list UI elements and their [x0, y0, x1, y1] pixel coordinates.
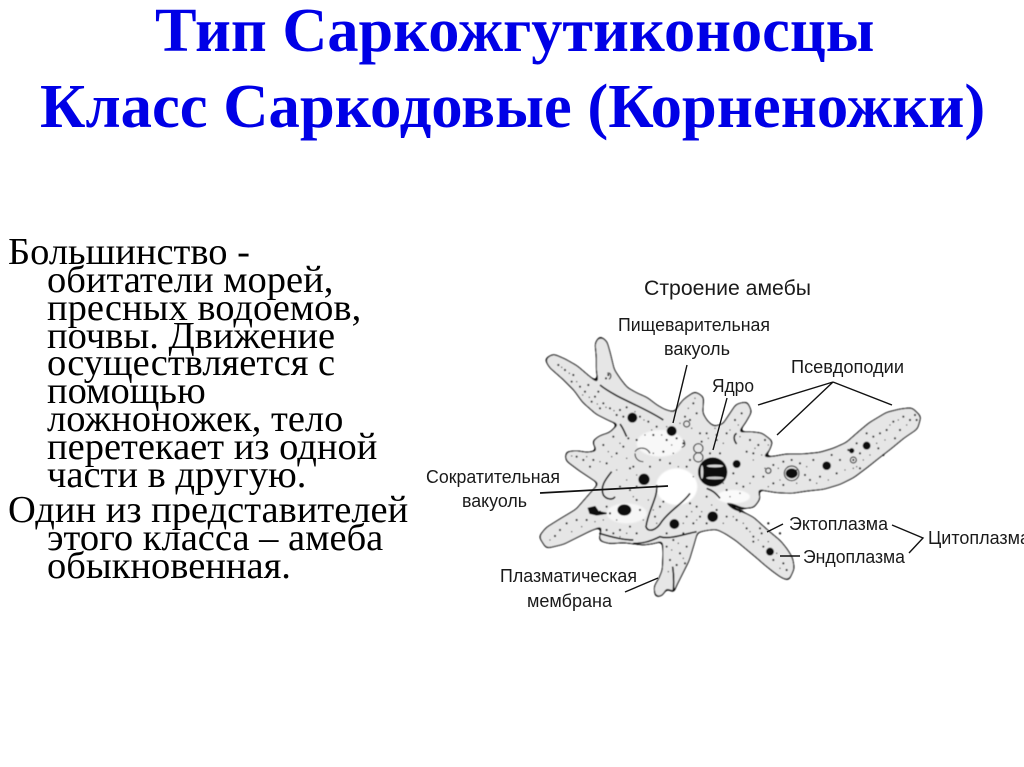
text block: description: этого класса – амеба	[47, 517, 383, 559]
text block: description: перетекает из одной	[47, 426, 377, 468]
text block: description: почвы. Движение	[47, 315, 335, 357]
label: plasma membrane: мембрана	[527, 591, 613, 611]
illustration: amoeba	[540, 337, 920, 596]
text block: description: части в другую.	[47, 454, 306, 496]
title	[40, 0, 985, 141]
text block: description: Один из представителей	[8, 489, 408, 531]
text block: description: осуществляется с	[47, 342, 335, 384]
label: pseudopodia: Псевдоподии	[791, 357, 904, 377]
food vacuoles	[588, 413, 870, 555]
text block: description: ложноножек, тело	[47, 398, 343, 440]
stipple	[555, 365, 917, 570]
text block: description: обитатели морей,	[47, 259, 333, 301]
label: contractile vacuole: вакуоль	[462, 491, 527, 511]
label: endoplasm: Эндоплазма	[803, 547, 906, 567]
nucleus	[698, 457, 727, 487]
text block: description: обыкновенная.	[47, 545, 291, 587]
small vesicles	[607, 373, 856, 481]
label: ectoplasm: Эктоплазма	[789, 514, 889, 534]
label: nucleus: Ядро	[712, 376, 754, 396]
fine stipple	[550, 367, 907, 572]
amoeba body	[540, 337, 920, 596]
text block: description: Большинство -	[8, 231, 250, 273]
title: Класс Саркодовые (Корненожки)	[40, 71, 985, 141]
pointer lines	[540, 365, 923, 592]
text block: description	[8, 231, 408, 587]
label: contractile vacuole: Сократительная	[426, 467, 560, 487]
caption: amoeba structure: Строение амебы	[644, 277, 811, 300]
text block: description: помощью	[47, 370, 206, 412]
text block: description: пресных водоемов,	[47, 287, 361, 329]
label: digestive vacuole: Пищеварительная	[618, 315, 770, 335]
label: digestive vacuole: вакуоль	[664, 339, 730, 359]
label: plasma membrane: Плазматическая	[500, 566, 637, 586]
label: plasma membrane	[500, 566, 637, 611]
inner lobes	[599, 385, 737, 591]
label: digestive vacuole	[618, 315, 770, 359]
label: contractile vacuole	[426, 467, 560, 511]
